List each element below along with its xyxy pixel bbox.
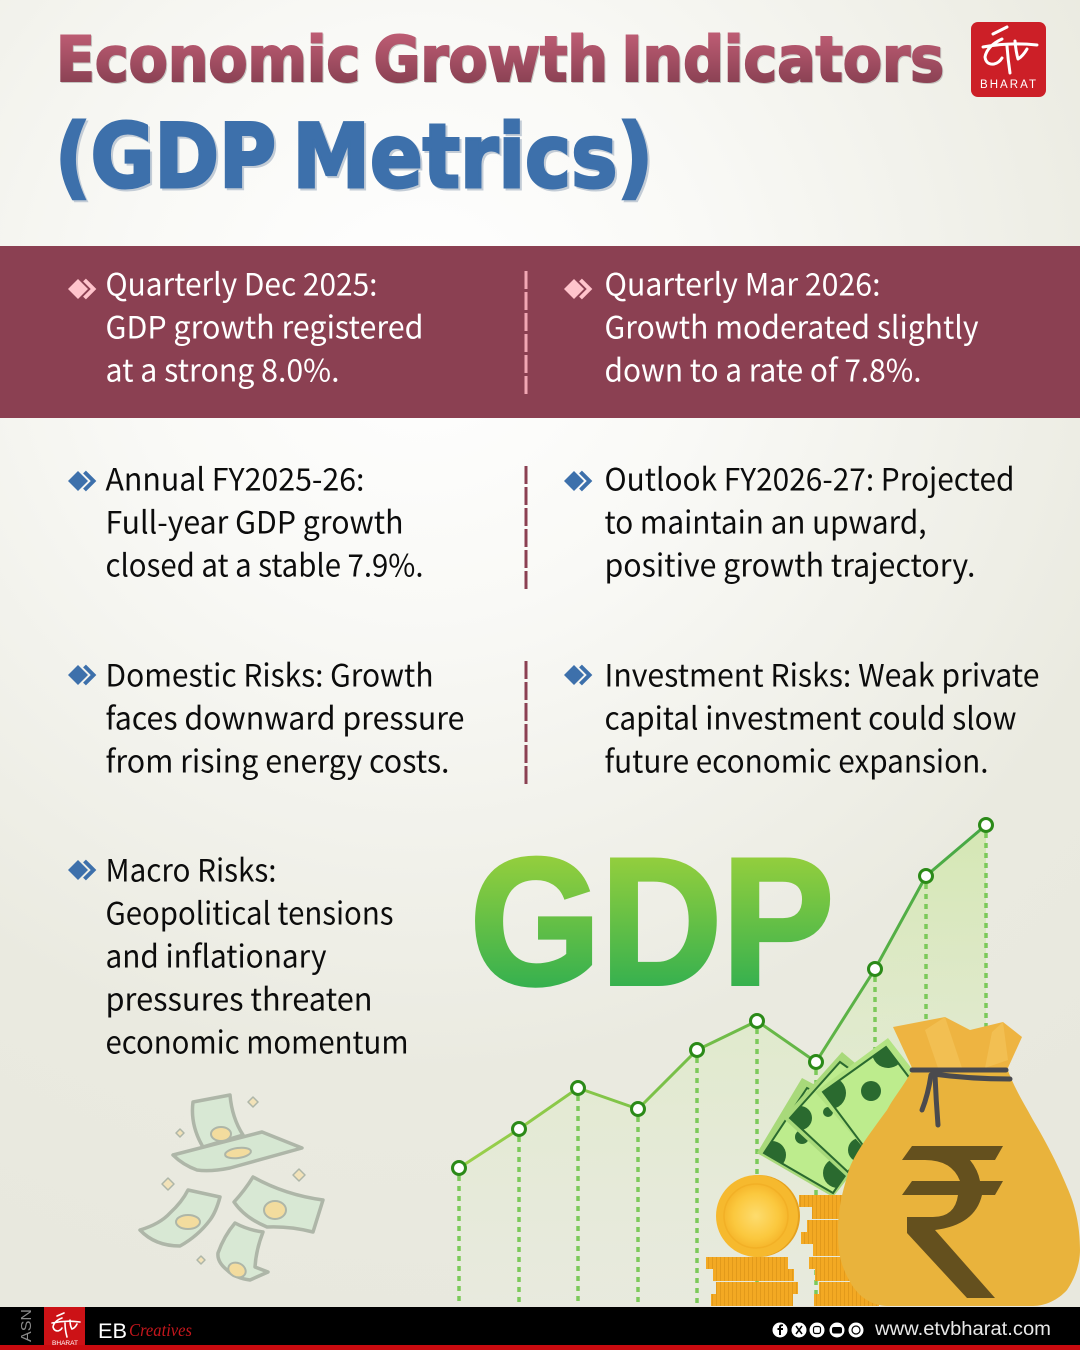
footer logo xyxy=(44,1307,85,1347)
label: EB Creatives: Creatives xyxy=(129,1320,192,1340)
text: Investment Risks: capital investment could slow xyxy=(604,694,1017,738)
text: Macro Risks xyxy=(106,846,408,1062)
text: Macro Risks: Macro Risks: xyxy=(106,846,276,890)
text: Outlook FY2026-27: positive growth trajectory. xyxy=(604,540,976,586)
bullet xyxy=(564,279,590,299)
text: Macro Risks: and inflationary xyxy=(106,932,326,976)
GDP big text: GDP xyxy=(470,821,834,1023)
label: EB Creatives: EB xyxy=(98,1320,127,1343)
text: Quarterly Dec 2025 xyxy=(106,260,424,390)
text: Quarterly Mar 2026: down to a rate of 7.8%. xyxy=(604,346,922,390)
text: Annual FY2025-26: closed at a stable 7.9%. xyxy=(106,540,424,586)
text: Quarterly Mar 2026: Growth moderated slightly xyxy=(604,302,978,348)
chart area xyxy=(459,825,986,1305)
label: EB Creatives xyxy=(98,1320,192,1343)
rupee symbol xyxy=(902,1146,1003,1298)
rope xyxy=(912,1070,1010,1125)
bullet: outlook xyxy=(564,471,590,491)
text: Outlook FY2026-27: Outlook FY2026-27: Projected xyxy=(604,454,1014,500)
bullet: investment risks xyxy=(564,665,590,685)
label: ASN: ASN xyxy=(18,1309,35,1342)
title xyxy=(55,23,944,208)
text: Quarterly Mar 2026: Quarterly Mar 2026: xyxy=(604,260,880,304)
website url: www.etvbharat.com xyxy=(874,1319,1051,1340)
text: Domestic Risks: faces downward pressure xyxy=(106,694,464,738)
footer bar xyxy=(0,1307,1080,1350)
text: Domestic Risks xyxy=(106,650,464,782)
logo: ETV Bharat: BHARAT xyxy=(980,79,1036,91)
bullet: annual xyxy=(68,471,94,491)
text: Outlook FY2026-27: to maintain an upward, xyxy=(604,498,926,542)
text: Investment Risks: Investment Risks: Weak private xyxy=(604,650,1040,696)
text: Domestic Risks: from rising energy costs. xyxy=(106,736,450,782)
text: Annual FY2025-26: Full-year GDP growth xyxy=(106,498,404,542)
title line 1: Economic Growth Indicators xyxy=(56,23,944,96)
text: Investment Risks: future economic expansion. xyxy=(604,736,988,782)
text: Investment Risks xyxy=(604,650,1040,782)
gold coin xyxy=(716,1175,800,1257)
bullet: macro risks xyxy=(68,860,94,880)
text: Quarterly Mar 2026 xyxy=(604,260,978,390)
text: Annual FY2025-26 xyxy=(106,454,424,586)
text: Domestic Risks: Domestic Risks: Growth xyxy=(106,650,434,696)
text: Outlook FY2026-27 xyxy=(604,454,1014,586)
text: Macro Risks: pressures threaten xyxy=(106,974,372,1020)
chart: growth line xyxy=(452,818,992,1305)
footer logo: BHARAT xyxy=(52,1340,78,1347)
text: Macro Risks: economic momentum xyxy=(106,1018,408,1062)
title line 2: (GDP Metrics) xyxy=(55,105,653,208)
icon: banknotes xyxy=(757,1038,911,1195)
text: Quarterly Dec 2025: at a strong 8.0%. xyxy=(106,346,340,390)
social icons xyxy=(772,1322,864,1338)
text: Annual FY2025-26: Annual FY2025-26: xyxy=(106,454,364,500)
panel: quarterly band xyxy=(0,246,1080,418)
logo: ETV Bharat xyxy=(971,22,1046,97)
bullet xyxy=(68,279,94,299)
text: Quarterly Dec 2025: Quarterly Dec 2025: xyxy=(106,260,378,304)
icon: rupee money bag xyxy=(838,1017,1080,1306)
text: Quarterly Dec 2025: GDP growth registered xyxy=(106,302,424,348)
text: Macro Risks: Geopolitical tensions xyxy=(106,888,394,934)
icon: coin stacks xyxy=(706,1175,879,1306)
icon: flying money xyxy=(140,1095,323,1280)
bullet: domestic risks xyxy=(68,665,94,685)
